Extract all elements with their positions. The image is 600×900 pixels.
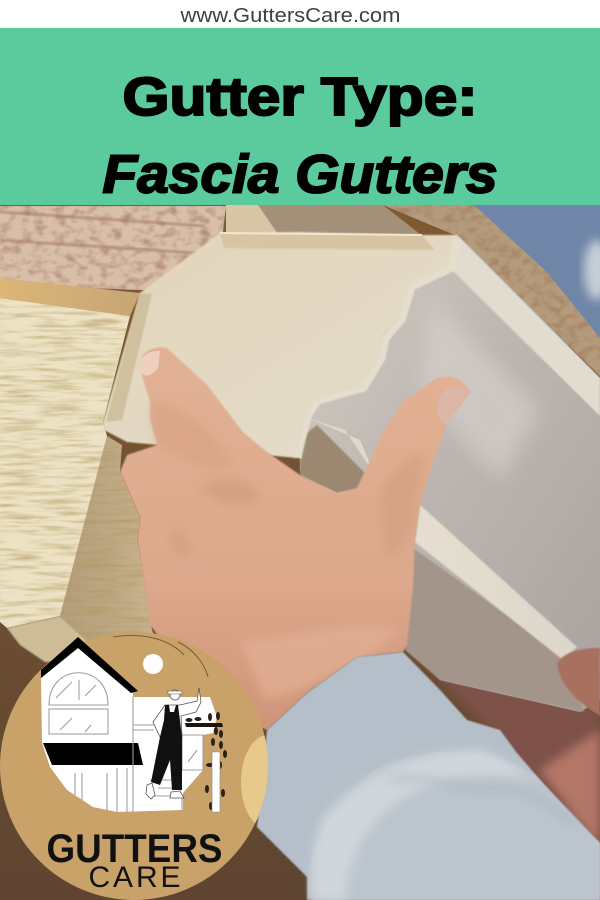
wood stucco face bbox=[0, 298, 130, 628]
leaves bbox=[186, 712, 227, 810]
logo disc bbox=[0, 632, 268, 900]
sky bbox=[470, 205, 600, 345]
sleeve bbox=[257, 652, 600, 900]
header strip bbox=[0, 0, 600, 28]
stone wall bbox=[383, 205, 600, 376]
wood fascia underside ledge bbox=[0, 278, 140, 316]
logo wordmark gutters: GUTTERS bbox=[46, 827, 222, 871]
sun bbox=[143, 654, 163, 674]
cap top lip bbox=[220, 233, 435, 250]
black band bbox=[43, 743, 143, 765]
photo: hand installing fascia gutter bbox=[0, 205, 600, 900]
logo: Gutters Care badge bbox=[0, 632, 295, 900]
brick ledge bbox=[0, 206, 226, 292]
sleeve folds bbox=[309, 752, 600, 900]
logo house illustration bbox=[41, 636, 227, 812]
drainpipe bbox=[212, 752, 220, 812]
worker bbox=[146, 688, 201, 799]
fingernail thumb bbox=[437, 387, 468, 424]
gutter underside bbox=[405, 548, 584, 712]
arc lines bbox=[113, 636, 208, 677]
website url: www.GuttersCare.com bbox=[179, 5, 400, 27]
roof bbox=[41, 637, 138, 693]
white house silhouette bbox=[41, 648, 217, 812]
logo translucent highlight bbox=[241, 736, 268, 824]
cap profile highlight bbox=[298, 238, 457, 458]
title banner bbox=[0, 28, 600, 205]
line work bbox=[49, 673, 203, 812]
cap left lip bbox=[106, 293, 152, 422]
gutter front lip bbox=[450, 235, 600, 416]
title line 2: Fascia Gutters bbox=[102, 144, 498, 204]
skin behind sleeve bbox=[430, 670, 600, 850]
gutter body bbox=[300, 235, 600, 712]
fingers on the far side bbox=[557, 648, 600, 716]
fingernail index bbox=[139, 351, 160, 375]
title line 1: Gutter Type: bbox=[122, 67, 477, 127]
hand bbox=[120, 347, 470, 730]
gutter dark seam under cap bbox=[300, 425, 372, 493]
gutter soft reflection bbox=[420, 300, 540, 480]
logo wordmark care: CARE bbox=[88, 861, 180, 894]
wood underside bbox=[60, 436, 160, 660]
hand shading bbox=[150, 403, 235, 470]
soffit bbox=[226, 205, 425, 238]
gutter end cap bbox=[103, 232, 457, 458]
gutter bottom strip bbox=[415, 505, 577, 660]
gutter debris bbox=[185, 723, 223, 727]
